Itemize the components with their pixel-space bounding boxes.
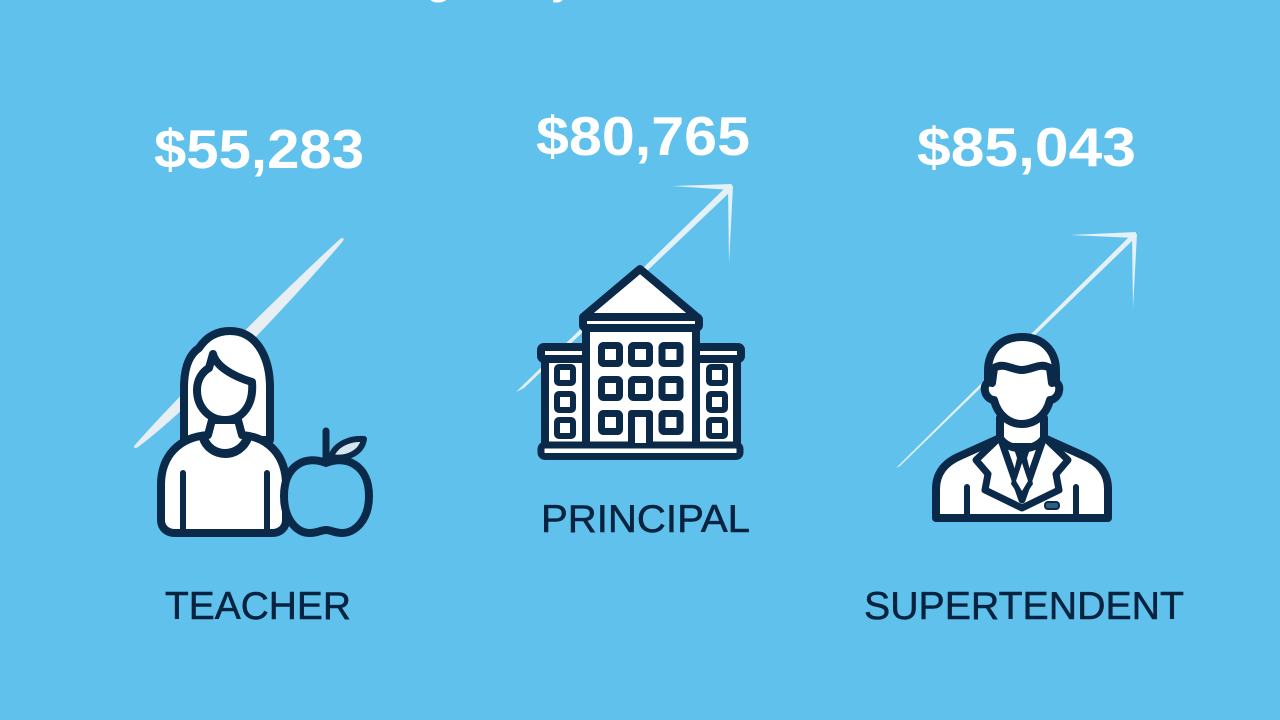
- teacher label: TEACHER: [165, 585, 351, 628]
- panel: principal: [516, 105, 750, 541]
- arrow streak: teacher: [134, 238, 344, 448]
- title (cropped at top edge): [426, 0, 575, 3]
- icon: school building: [541, 269, 741, 456]
- panel: superintendent: [864, 116, 1184, 628]
- principal salary value: $80,765: [536, 105, 750, 167]
- icon: superintendent in suit: [936, 337, 1108, 518]
- teacher salary value: $55,283: [154, 118, 364, 180]
- arrow: principal: [516, 184, 733, 392]
- superintendent label: SUPERTENDENT: [864, 585, 1184, 628]
- principal label: PRINCIPAL: [541, 498, 750, 541]
- superintendent salary value: $85,043: [917, 116, 1136, 178]
- icon: teacher with apple: [161, 331, 369, 533]
- arrow: superintendent: [896, 232, 1137, 468]
- main windows: [557, 346, 725, 443]
- panel: teacher: [134, 118, 369, 628]
